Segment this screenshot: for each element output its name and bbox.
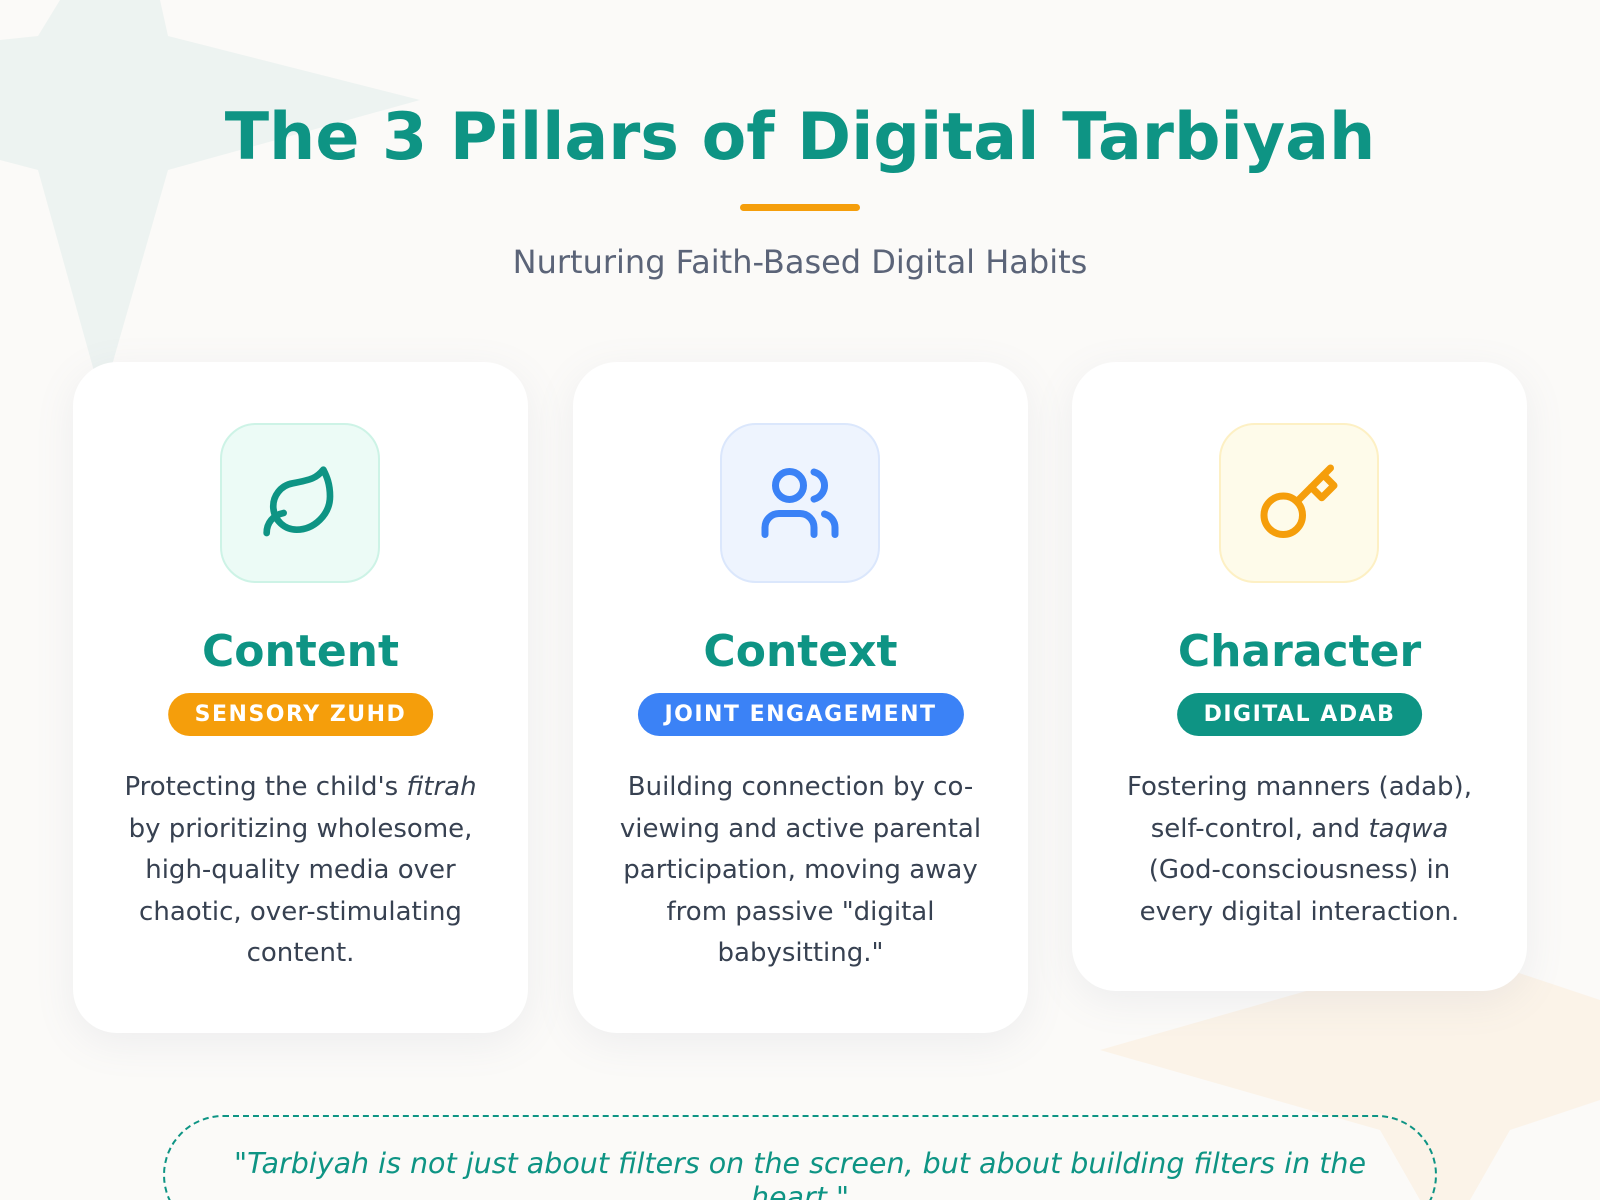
subtitle: Nurturing Faith-Based Digital Habits [513,243,1087,281]
background star: bottom-right [1101,973,1600,1200]
badge: sensory zuhd: SENSORY ZUHD [195,702,406,727]
heading: Character: Character [1178,626,1421,677]
callout: quote [163,1115,1437,1200]
badge: digital adab [1177,693,1422,736]
text: content description: Protecting the child's fitrah by prioritizing wholesome, high-quality media over chaotic, over-stimulating content. [124,772,477,968]
panel: content [73,362,528,1033]
panel: context [573,362,1028,1033]
icon: leaf [220,423,380,583]
badge: joint engagement: JOINT ENGAGEMENT [664,702,937,727]
title underline [740,204,860,211]
background star: top-left [0,0,419,368]
badge: joint engagement [637,693,964,736]
badge: sensory zuhd [168,693,433,736]
panel: character [1072,362,1527,991]
heading: Content: Content [202,626,399,677]
badge: digital adab: DIGITAL ADAB [1204,702,1395,727]
icon: key [1219,423,1379,583]
title: The 3 Pillars of Digital Tarbiyah [225,100,1375,175]
text: context description: Building connection by co-viewing and active parental participation, moving away from passive "digital babysitting." [620,772,981,968]
heading: Context: Context [703,626,898,677]
icon: users [720,423,880,583]
text: character description: Fostering manners (adab), self-control, and taqwa (God-consciousness) in every digital interaction. [1127,772,1472,926]
